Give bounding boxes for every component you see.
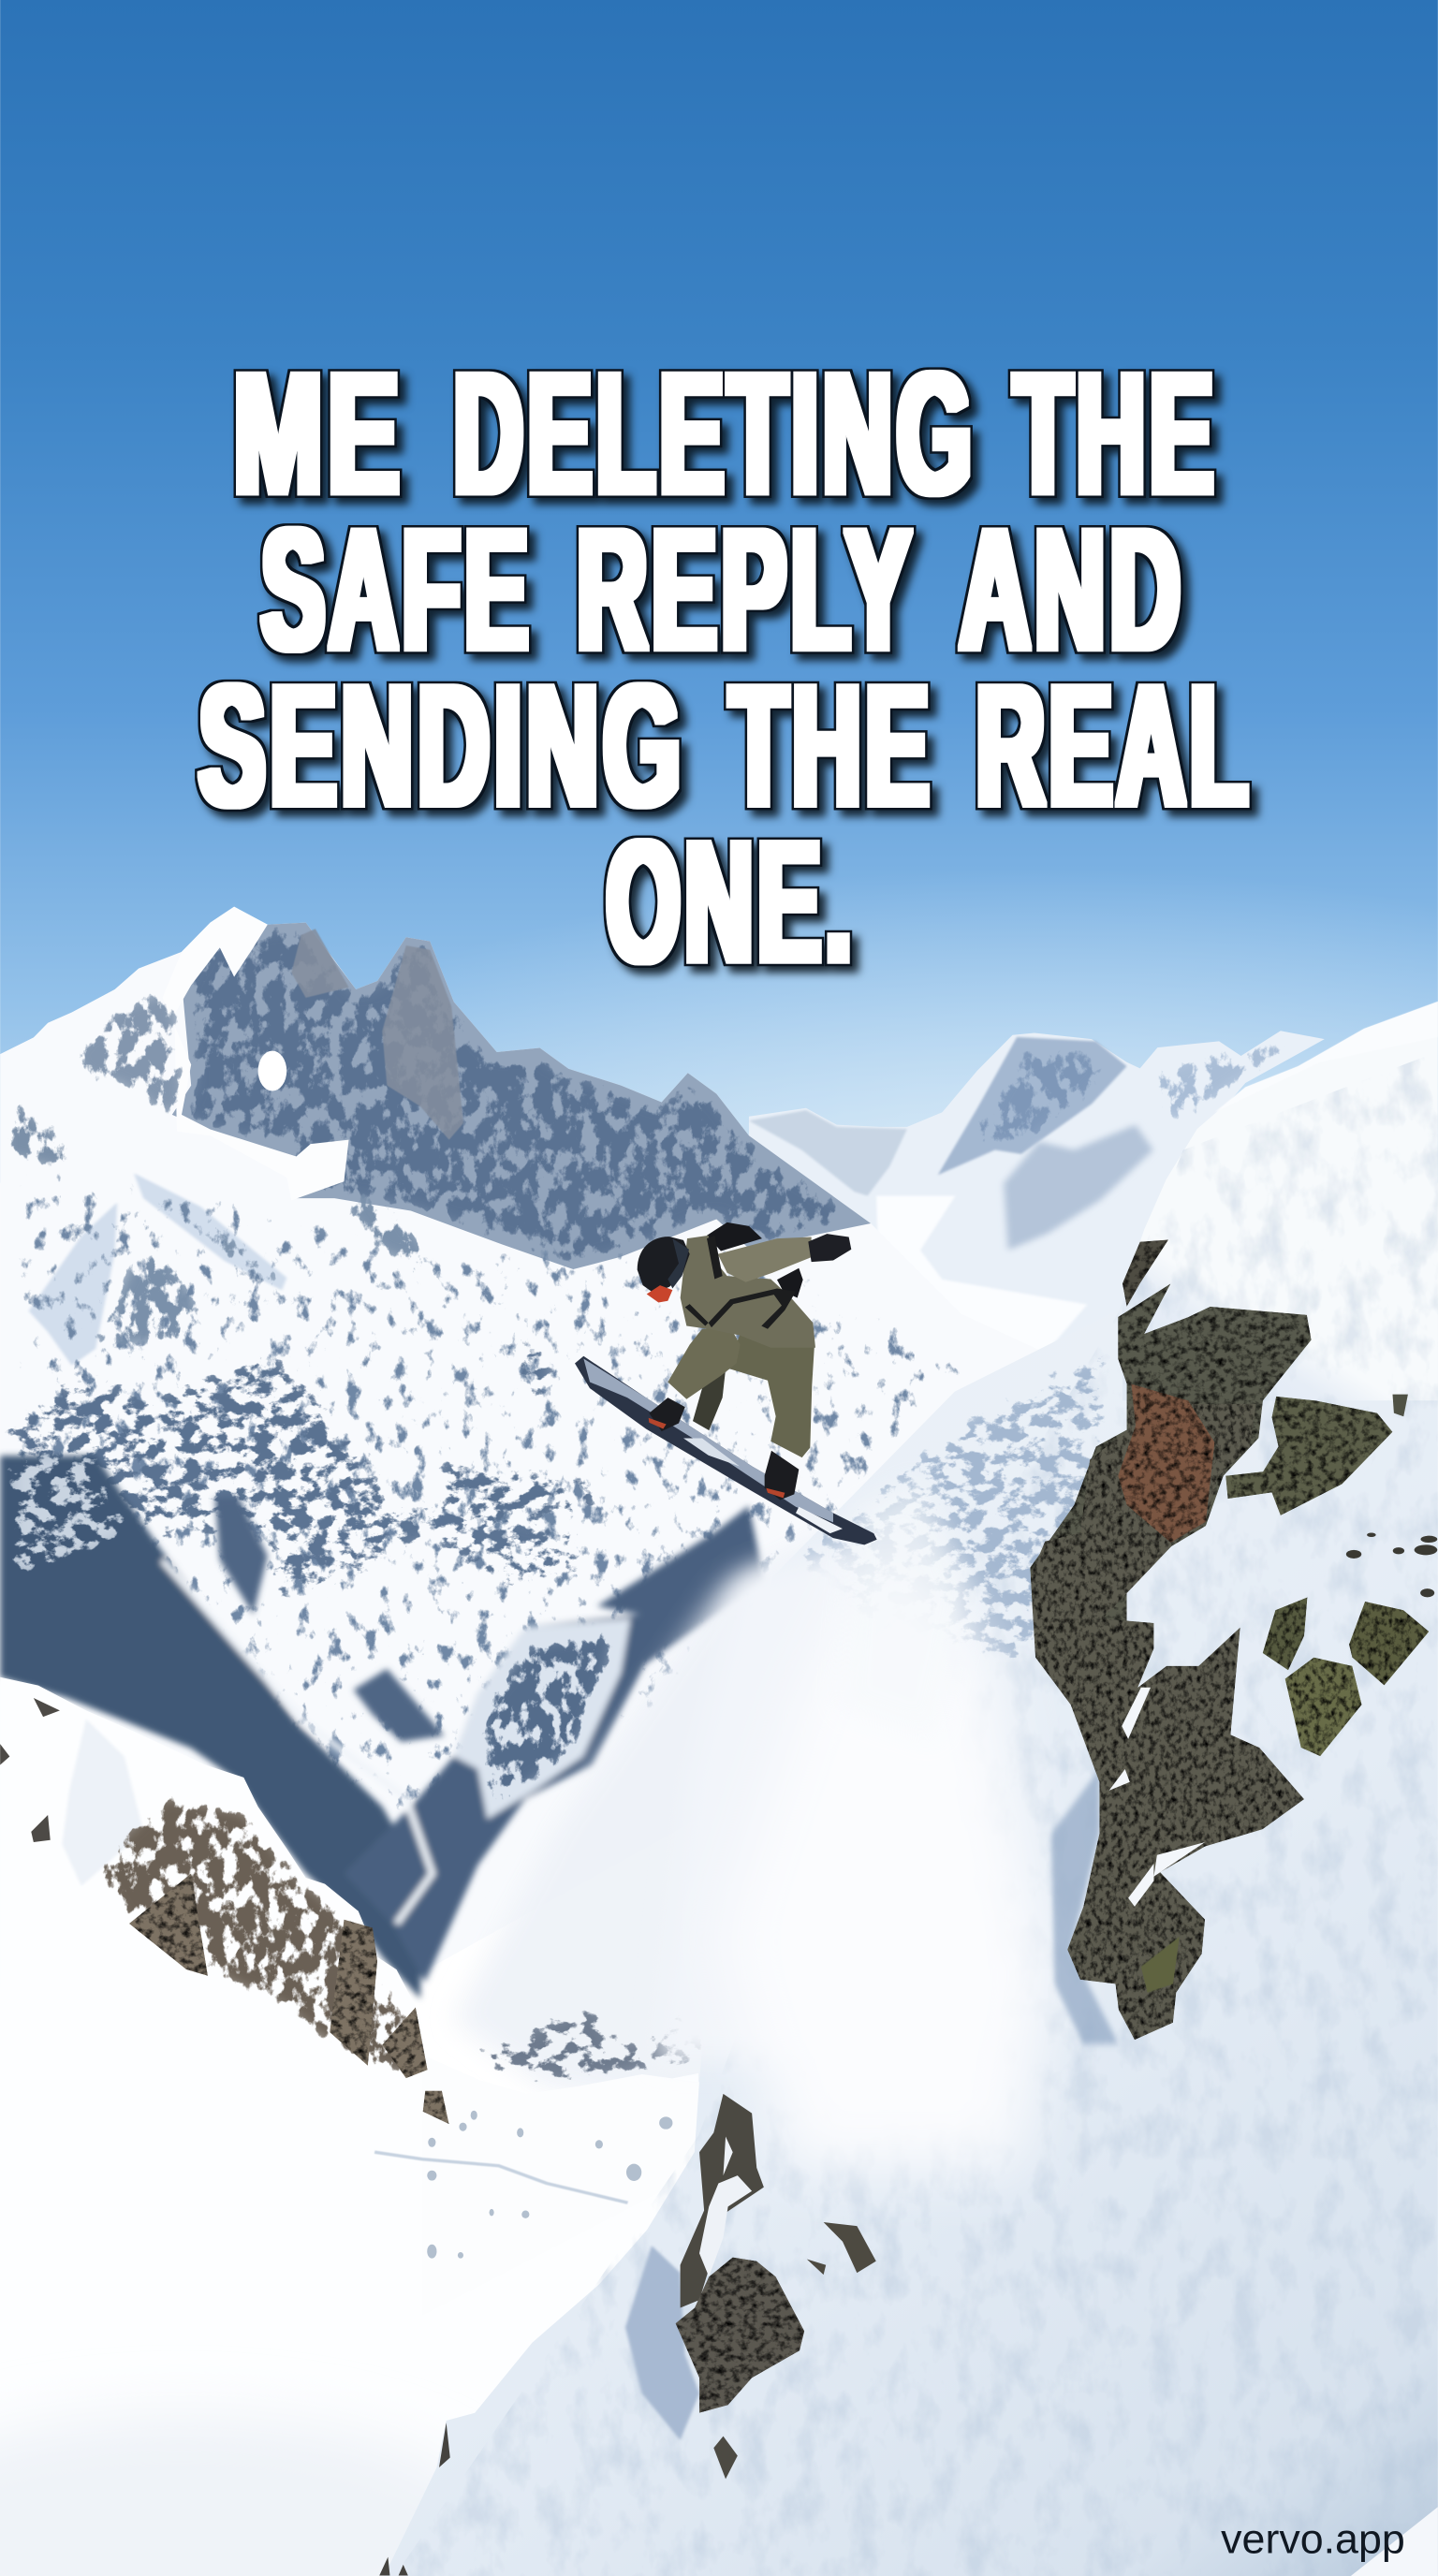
- west ridge rock: [62, 981, 191, 1123]
- watermark: vervo.app: [1221, 2516, 1405, 2562]
- powder haze over the valley: [454, 1519, 986, 2119]
- blue snow shadow: [29, 1173, 286, 1366]
- left foreground rocks: [0, 1698, 449, 2124]
- snow cuts on rock: [1109, 1688, 1205, 1907]
- harness straps: [685, 1236, 796, 1329]
- left mountain massif: [0, 907, 1068, 1998]
- headline: ONE.: [607, 806, 857, 999]
- snow chunks on the foreground: [427, 2111, 672, 2259]
- low bottom shade: [0, 2415, 493, 2576]
- white ridge on distant peaks: [1144, 1035, 1320, 1125]
- goggles: [647, 1285, 672, 1302]
- grey rocks under the spray: [463, 1990, 716, 2095]
- small rock cluster: [807, 2222, 876, 2275]
- right mossy outcrop: [1225, 1397, 1392, 1515]
- headline: THE: [1014, 338, 1218, 531]
- slope edge rocks: [379, 2422, 450, 2576]
- snowboarder: [575, 1222, 877, 1544]
- blue shadow below cliff: [1051, 1769, 1119, 2044]
- foreground shadow hollow: [62, 1719, 143, 1886]
- right snow dome: [1123, 1002, 1438, 1400]
- helmet: [638, 1237, 690, 1293]
- massif rock bands: [86, 1186, 445, 1349]
- glove: [808, 1234, 851, 1262]
- boulder: [676, 2257, 804, 2413]
- headline: THE: [729, 650, 933, 842]
- hanging snow blob: [258, 1051, 286, 1090]
- pants: [727, 1335, 814, 1457]
- right cliff rocks: [1030, 1239, 1437, 2044]
- distant right peaks: [749, 1031, 1325, 1400]
- snow hollow shadow: [625, 2246, 699, 2440]
- headline: AND: [960, 493, 1185, 686]
- smooth grey spire: [291, 929, 463, 1140]
- forest snow flecks: [0, 1443, 143, 1581]
- high ridge base shade: [172, 923, 871, 1269]
- headline: SAFE: [261, 493, 533, 686]
- jacket torso: [681, 1236, 815, 1348]
- powder spray cloud: [657, 1479, 1051, 2169]
- rock specks on snow: [1346, 1532, 1437, 1597]
- snow streaks on rock: [699, 2137, 752, 2276]
- valley lower rock field: [239, 1498, 588, 1610]
- backpack: [707, 1222, 803, 1297]
- high ridge dark crags: [172, 923, 871, 1269]
- rear boot: [765, 1451, 799, 1500]
- moss outcrops: [1141, 1597, 1429, 1993]
- scattered rock on snowfield: [0, 1149, 1003, 1850]
- snow summit and ridge: [163, 907, 349, 1200]
- main upper rock: [1030, 1283, 1312, 1638]
- massif lower rock field: [0, 1307, 812, 1544]
- jacket arm: [718, 1237, 812, 1282]
- rear pant leg shadow: [693, 1369, 726, 1430]
- front boot: [649, 1398, 685, 1431]
- streaky upper rock: [681, 2094, 764, 2307]
- goggle strap: [668, 1238, 689, 1288]
- binding pads: [649, 1418, 785, 1498]
- snow ridge line: [374, 2152, 627, 2203]
- snowboard: [575, 1356, 877, 1544]
- small rock speck: [1392, 1395, 1408, 1416]
- left foreground snowfield: [0, 1677, 699, 2576]
- dark forest slopes: [0, 1456, 764, 1998]
- far left crag: [0, 1091, 86, 1178]
- headline: ME: [233, 338, 404, 531]
- upper rock sliver: [1123, 1239, 1168, 1307]
- lower slope rocks: [379, 2094, 876, 2576]
- small low rock: [713, 2437, 738, 2479]
- headline: DELETING: [454, 338, 976, 531]
- distant peak crag detail: [942, 1041, 1118, 1166]
- rust patch on rock: [1118, 1383, 1214, 1543]
- main snow slope: [384, 1002, 1438, 2576]
- headline: REPLY: [577, 493, 916, 686]
- snow surface texture: [394, 1051, 1438, 2576]
- headline: SENDING: [199, 650, 685, 842]
- lower main rock face: [1031, 1404, 1304, 2040]
- corner snow highlight: [1351, 2507, 1438, 2576]
- blue valley slope under the board: [772, 1331, 1118, 1676]
- sky background: [0, 0, 1438, 1183]
- ridge rock over snow: [477, 1623, 621, 1819]
- dome crest highlight: [1214, 1002, 1438, 1112]
